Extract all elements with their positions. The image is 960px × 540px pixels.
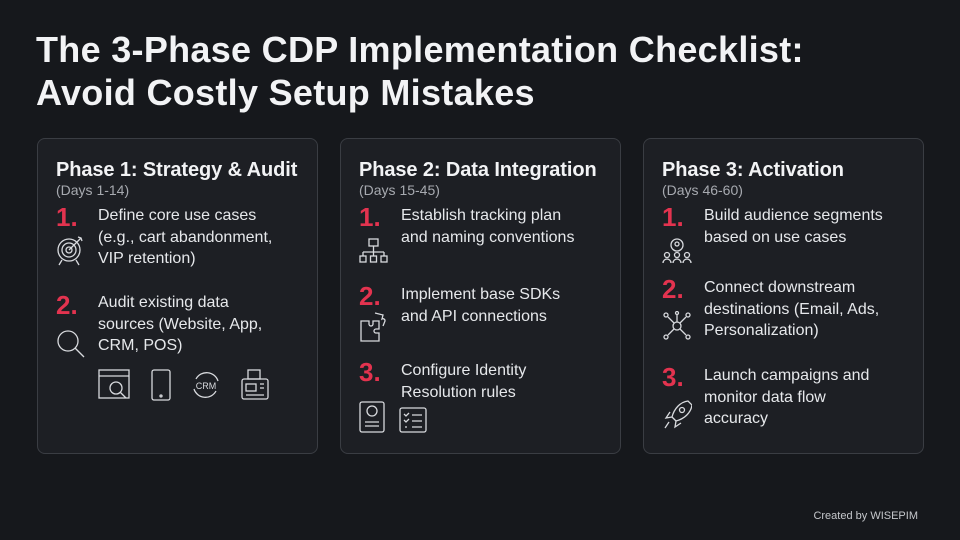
text: item 1 [401, 207, 574, 246]
text: item 2: Implement base SDKs [401, 286, 560, 303]
text: item 2 [401, 286, 560, 324]
text: item 3: Configure Identity [401, 362, 526, 379]
icon: puzzle [360, 312, 386, 342]
icon: rocket [664, 400, 692, 428]
text: item 2: and API connections [401, 308, 547, 324]
number 1: 1. [359, 202, 381, 232]
text: item 3: Resolution rules [401, 384, 516, 400]
text: item 2: Audit existing data [98, 294, 229, 311]
text: item 1: Build audience segments [704, 207, 883, 224]
days: phase 2: (Days 15-45) [359, 182, 440, 198]
text: item 2: CRM, POS) [98, 337, 182, 354]
number 3: 3. [662, 362, 684, 392]
text: item 1: VIP retention) [98, 250, 196, 267]
text: item 1: Establish tracking plan [401, 207, 561, 224]
text: item 3: Launch campaigns and [704, 367, 869, 384]
text: item 1: Define core use cases [98, 207, 256, 224]
title [36, 29, 804, 113]
icon: hierarchy [359, 238, 388, 263]
number 2: 2. [56, 290, 78, 320]
days: phase 1: (Days 1-14) [56, 182, 129, 198]
icons: data sources [98, 369, 269, 401]
panel: phase 1 [37, 138, 318, 454]
title: Avoid Costly Setup Mistakes [36, 72, 535, 113]
icon: magnifier [57, 330, 84, 358]
number 2: 2. [359, 281, 381, 311]
title: The 3-Phase CDP Implementation Checklist: [36, 29, 804, 70]
heading: phase 1: Phase 1: Strategy & Audit [56, 159, 297, 181]
number 3: 3. [359, 357, 381, 387]
text: item 2: Personalization) [704, 322, 819, 339]
text: item 2 [704, 279, 879, 339]
heading: phase 3: Phase 3: Activation [662, 159, 844, 181]
text: item 2: destinations (Email, Ads, [704, 300, 879, 318]
icons: identity [359, 401, 427, 433]
icon: network [663, 311, 691, 340]
text: item 2 [98, 294, 262, 354]
icon: audience [662, 238, 692, 263]
text: item 1: (e.g., cart abandonment, [98, 228, 272, 246]
number 1: 1. [56, 202, 78, 232]
text: item 2: Connect downstream [704, 279, 855, 296]
text: item 2: sources (Website, App, [98, 316, 262, 332]
number 2: 2. [662, 274, 684, 304]
footer credit: Created by WISEPIM [813, 510, 918, 522]
text: item 3 [704, 367, 869, 427]
icons: data sources: CRM [196, 381, 216, 391]
number 1: 1. [662, 202, 684, 232]
text: item 3: accuracy [704, 410, 768, 427]
text: item 1: based on use cases [704, 228, 846, 246]
days: phase 3: (Days 46-60) [662, 182, 743, 198]
icon: target [57, 236, 83, 266]
panel: phase 2 [340, 138, 621, 454]
text: item 1: and naming conventions [401, 228, 574, 246]
text: item 1 [704, 207, 883, 246]
text: item 3 [401, 362, 526, 400]
text: item 1 [98, 207, 272, 267]
text: item 3: monitor data flow [704, 388, 826, 406]
panel: phase 3 [643, 138, 924, 454]
heading: phase 2: Phase 2: Data Integration [359, 159, 597, 181]
